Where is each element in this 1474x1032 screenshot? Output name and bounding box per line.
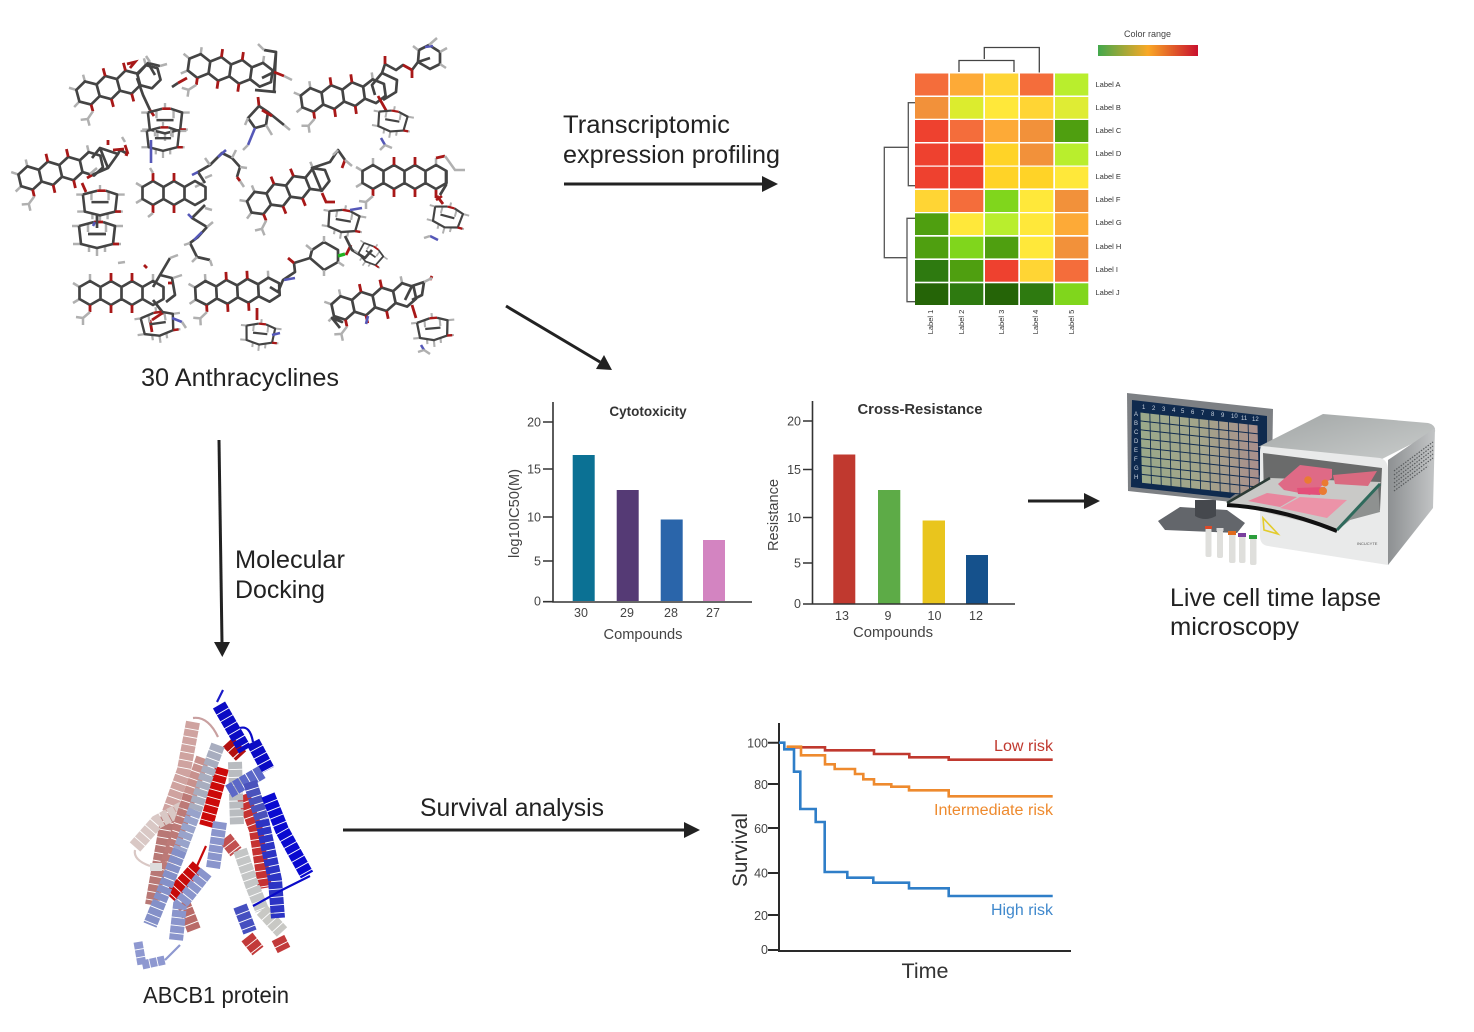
molecule: right anthracycline [356, 156, 471, 240]
cytotoxicity axis ticks: 29 [620, 606, 634, 620]
curve labels: Low risk [994, 738, 1053, 755]
cross-resistance axis ticks: 5 [794, 556, 801, 570]
panel: ABCB1 protein ribbon [135, 690, 310, 965]
heatmap row labels: Label G [1096, 218, 1122, 227]
monitor plate labels: 6 [1191, 410, 1195, 416]
heatmap row labels: Label F [1096, 195, 1121, 204]
label: ABCB1 protein: ABCB1 protein [143, 982, 289, 1008]
instrument opening [1263, 453, 1382, 510]
survival axis ticks: 100 [747, 736, 768, 750]
panel: live cell imaging instrument [1127, 393, 1435, 565]
molecule: lower middle anthracycline with chlorophenyl [188, 236, 345, 353]
molecule: central mitoxantrone-like compound [136, 150, 247, 266]
cytotoxicity axis titles: log10IC50(M) [507, 469, 523, 558]
monitor plate labels: A [1134, 412, 1138, 418]
survival axes [768, 723, 1071, 951]
molecule: lower right anthracycline [322, 273, 456, 354]
heatmap row labels [1096, 80, 1122, 297]
cross-resistance axis ticks: 15 [787, 463, 801, 477]
molecule: left middle anthracycline [9, 137, 128, 256]
label: Transcriptomic expression profiling: expression profiling [563, 141, 780, 169]
arrow: survival analysis [343, 822, 700, 838]
heatmap color range legend: Color range [1124, 29, 1171, 39]
high risk curve [779, 743, 1053, 896]
cytotoxicity axis ticks: 15 [527, 462, 541, 476]
survival axis ticks: 80 [754, 778, 768, 792]
back helices: pink [135, 718, 218, 930]
cytotoxicity axis ticks: 5 [534, 554, 541, 568]
cytotoxicity title: Cytotoxicity [609, 404, 687, 419]
instrument vents [1394, 442, 1433, 491]
monitor plate labels: 4 [1172, 408, 1176, 414]
cross-resistance title: Cross-Resistance [858, 402, 982, 418]
monitor [1127, 393, 1273, 502]
tray with culture plates [1227, 465, 1381, 531]
monitor plate labels: 3 [1162, 407, 1166, 413]
label: Live cell time lapse microscopy: microscopy [1170, 613, 1300, 641]
arrow: molecules to bar charts [506, 306, 612, 370]
arrow: to transcriptomic profiling [564, 176, 778, 192]
label: 30 Anthracyclines: 30 Anthracyclines [141, 364, 339, 392]
cytotoxicity axis ticks: 27 [706, 606, 720, 620]
monitor plate labels: H [1134, 475, 1138, 481]
cytotoxicity axis titles [507, 469, 682, 643]
cytotoxicity axis ticks: 28 [664, 606, 678, 620]
heatmap row labels: Label H [1096, 242, 1121, 251]
heatmap column labels: Label 2 [957, 310, 966, 334]
monitor stand [1158, 500, 1245, 533]
monitor plate labels: C [1134, 430, 1139, 436]
cross-resistance axis ticks: 10 [787, 511, 801, 525]
incubator instrument body [1258, 414, 1435, 565]
label: Live cell time lapse microscopy [1170, 584, 1381, 641]
cross-resistance axis ticks: 10 [928, 609, 941, 623]
cytotoxicity bars [573, 455, 725, 601]
monitor plate labels: 12 [1252, 417, 1259, 423]
label: Molecular Docking: Docking [235, 576, 325, 604]
cross-resistance axis ticks [787, 414, 983, 623]
survival axis ticks: 40 [754, 866, 768, 880]
survival axis ticks [747, 736, 768, 957]
monitor plate labels: G [1134, 466, 1139, 472]
heatmap row labels: Label A [1096, 80, 1121, 89]
arrow: molecular docking [214, 440, 230, 657]
monitor plate labels: B [1134, 421, 1138, 427]
column dendrogram [959, 48, 1039, 72]
cytotoxicity axis ticks: 10 [527, 510, 541, 524]
cytotoxicity axis titles: Compounds [604, 627, 682, 643]
cytotoxicity axes [543, 402, 752, 602]
cross-resistance axis ticks: 12 [969, 609, 983, 623]
grey helices [235, 762, 282, 932]
curve labels: Intermediate risk [934, 802, 1053, 819]
intermediate risk curve [787, 747, 1053, 796]
chart: survival curves [729, 723, 1071, 983]
low risk curve [787, 747, 1053, 760]
monitor plate labels: 8 [1211, 412, 1215, 418]
cross-resistance axis ticks: 13 [835, 609, 849, 623]
heatmap column labels [926, 310, 1076, 334]
heatmap column labels: Label 3 [997, 310, 1006, 334]
orange tube caps [1304, 476, 1328, 495]
panel: heatmap [884, 29, 1198, 334]
monitor plate labels: 9 [1221, 413, 1225, 419]
heatmap color range legend [1098, 29, 1198, 56]
monitor plate labels: 2 [1152, 406, 1156, 412]
survival axis titles [729, 813, 948, 983]
molecule: top right anthracycline [292, 38, 447, 150]
heatmap row labels: Label E [1096, 172, 1121, 181]
curve labels [934, 738, 1053, 919]
red helices [170, 742, 265, 897]
curve labels: High risk [991, 902, 1053, 919]
heatmap cells [915, 74, 1088, 305]
heatmap column labels: Label 5 [1067, 310, 1076, 334]
survival axis ticks: 60 [754, 822, 768, 836]
chart: cross-resistance bars [766, 401, 1015, 641]
cross-resistance axis titles [766, 479, 933, 641]
chart: cytotoxicity bars [507, 402, 752, 643]
cytotoxicity axis ticks: 30 [574, 606, 588, 620]
heatmap column labels: Label 1 [926, 310, 935, 334]
label: Transcriptomic expression profiling: Transcriptomic [563, 111, 730, 139]
arrow: bar charts to microscopy [1028, 493, 1100, 509]
row dendrogram [884, 103, 915, 302]
survival axis titles: Time [902, 960, 948, 983]
heatmap row labels: Label D [1096, 149, 1122, 158]
molecule: lower left anthracycline [73, 255, 186, 346]
label: Live cell time lapse microscopy: Live cell time lapse [1170, 584, 1381, 612]
label: Molecular Docking: Molecular [235, 546, 345, 574]
cross-resistance axis ticks: 20 [787, 414, 801, 428]
survival axis ticks: 0 [761, 943, 768, 957]
monitor plate labels: 11 [1241, 416, 1248, 422]
panel: 30 anthracyclines molecule collection [9, 38, 471, 354]
cytotoxicity axis ticks [527, 416, 720, 620]
yellow warning triangle [1263, 518, 1278, 534]
monitor plate labels: F [1134, 457, 1138, 463]
monitor plate labels: 10 [1231, 414, 1238, 420]
monitor plate labels: 7 [1201, 411, 1205, 417]
label: Survival analysis: Survival analysis [420, 794, 604, 822]
monitor plate labels: E [1134, 448, 1138, 454]
cytotoxicity axis ticks: 20 [527, 416, 541, 430]
survival axis ticks: 20 [754, 909, 768, 923]
survival axis titles: Survival [729, 813, 752, 887]
cross-resistance axis titles: Compounds [853, 625, 933, 641]
cross-resistance axis ticks: 9 [885, 609, 892, 623]
molecule: top left anthracycline [66, 55, 190, 163]
periwinkle helices [138, 745, 220, 965]
monitor plate labels: 5 [1181, 409, 1185, 415]
label: Molecular Docking [235, 546, 345, 604]
cross-resistance axis titles: Resistance [766, 479, 782, 551]
cross-resistance axis ticks: 0 [794, 597, 801, 611]
monitor plate labels: 1 [1142, 405, 1146, 411]
heatmap row labels: Label B [1096, 103, 1121, 112]
heatmap column labels: Label 4 [1031, 310, 1040, 334]
heatmap row labels: Label C [1096, 126, 1122, 135]
heatmap row labels: Label I [1096, 265, 1118, 274]
reagent vials [1205, 526, 1257, 565]
molecule: centre right anthracycline [236, 150, 391, 275]
monitor well plate grid [1140, 412, 1260, 496]
heatmap row labels: Label J [1096, 288, 1120, 297]
instrument brand text: INCUCYTE [1357, 541, 1378, 546]
cytotoxicity axis ticks: 0 [534, 594, 541, 608]
molecule: top middle anthracycline [172, 44, 292, 150]
icon: chlorine atom [338, 254, 345, 256]
cross-resistance bars [833, 454, 988, 604]
label: Transcriptomic expression profiling [563, 111, 780, 169]
monitor plate labels: D [1134, 439, 1139, 445]
cross-resistance axes [803, 401, 1015, 604]
blue helices [217, 690, 310, 951]
monitor plate labels [1134, 405, 1259, 481]
